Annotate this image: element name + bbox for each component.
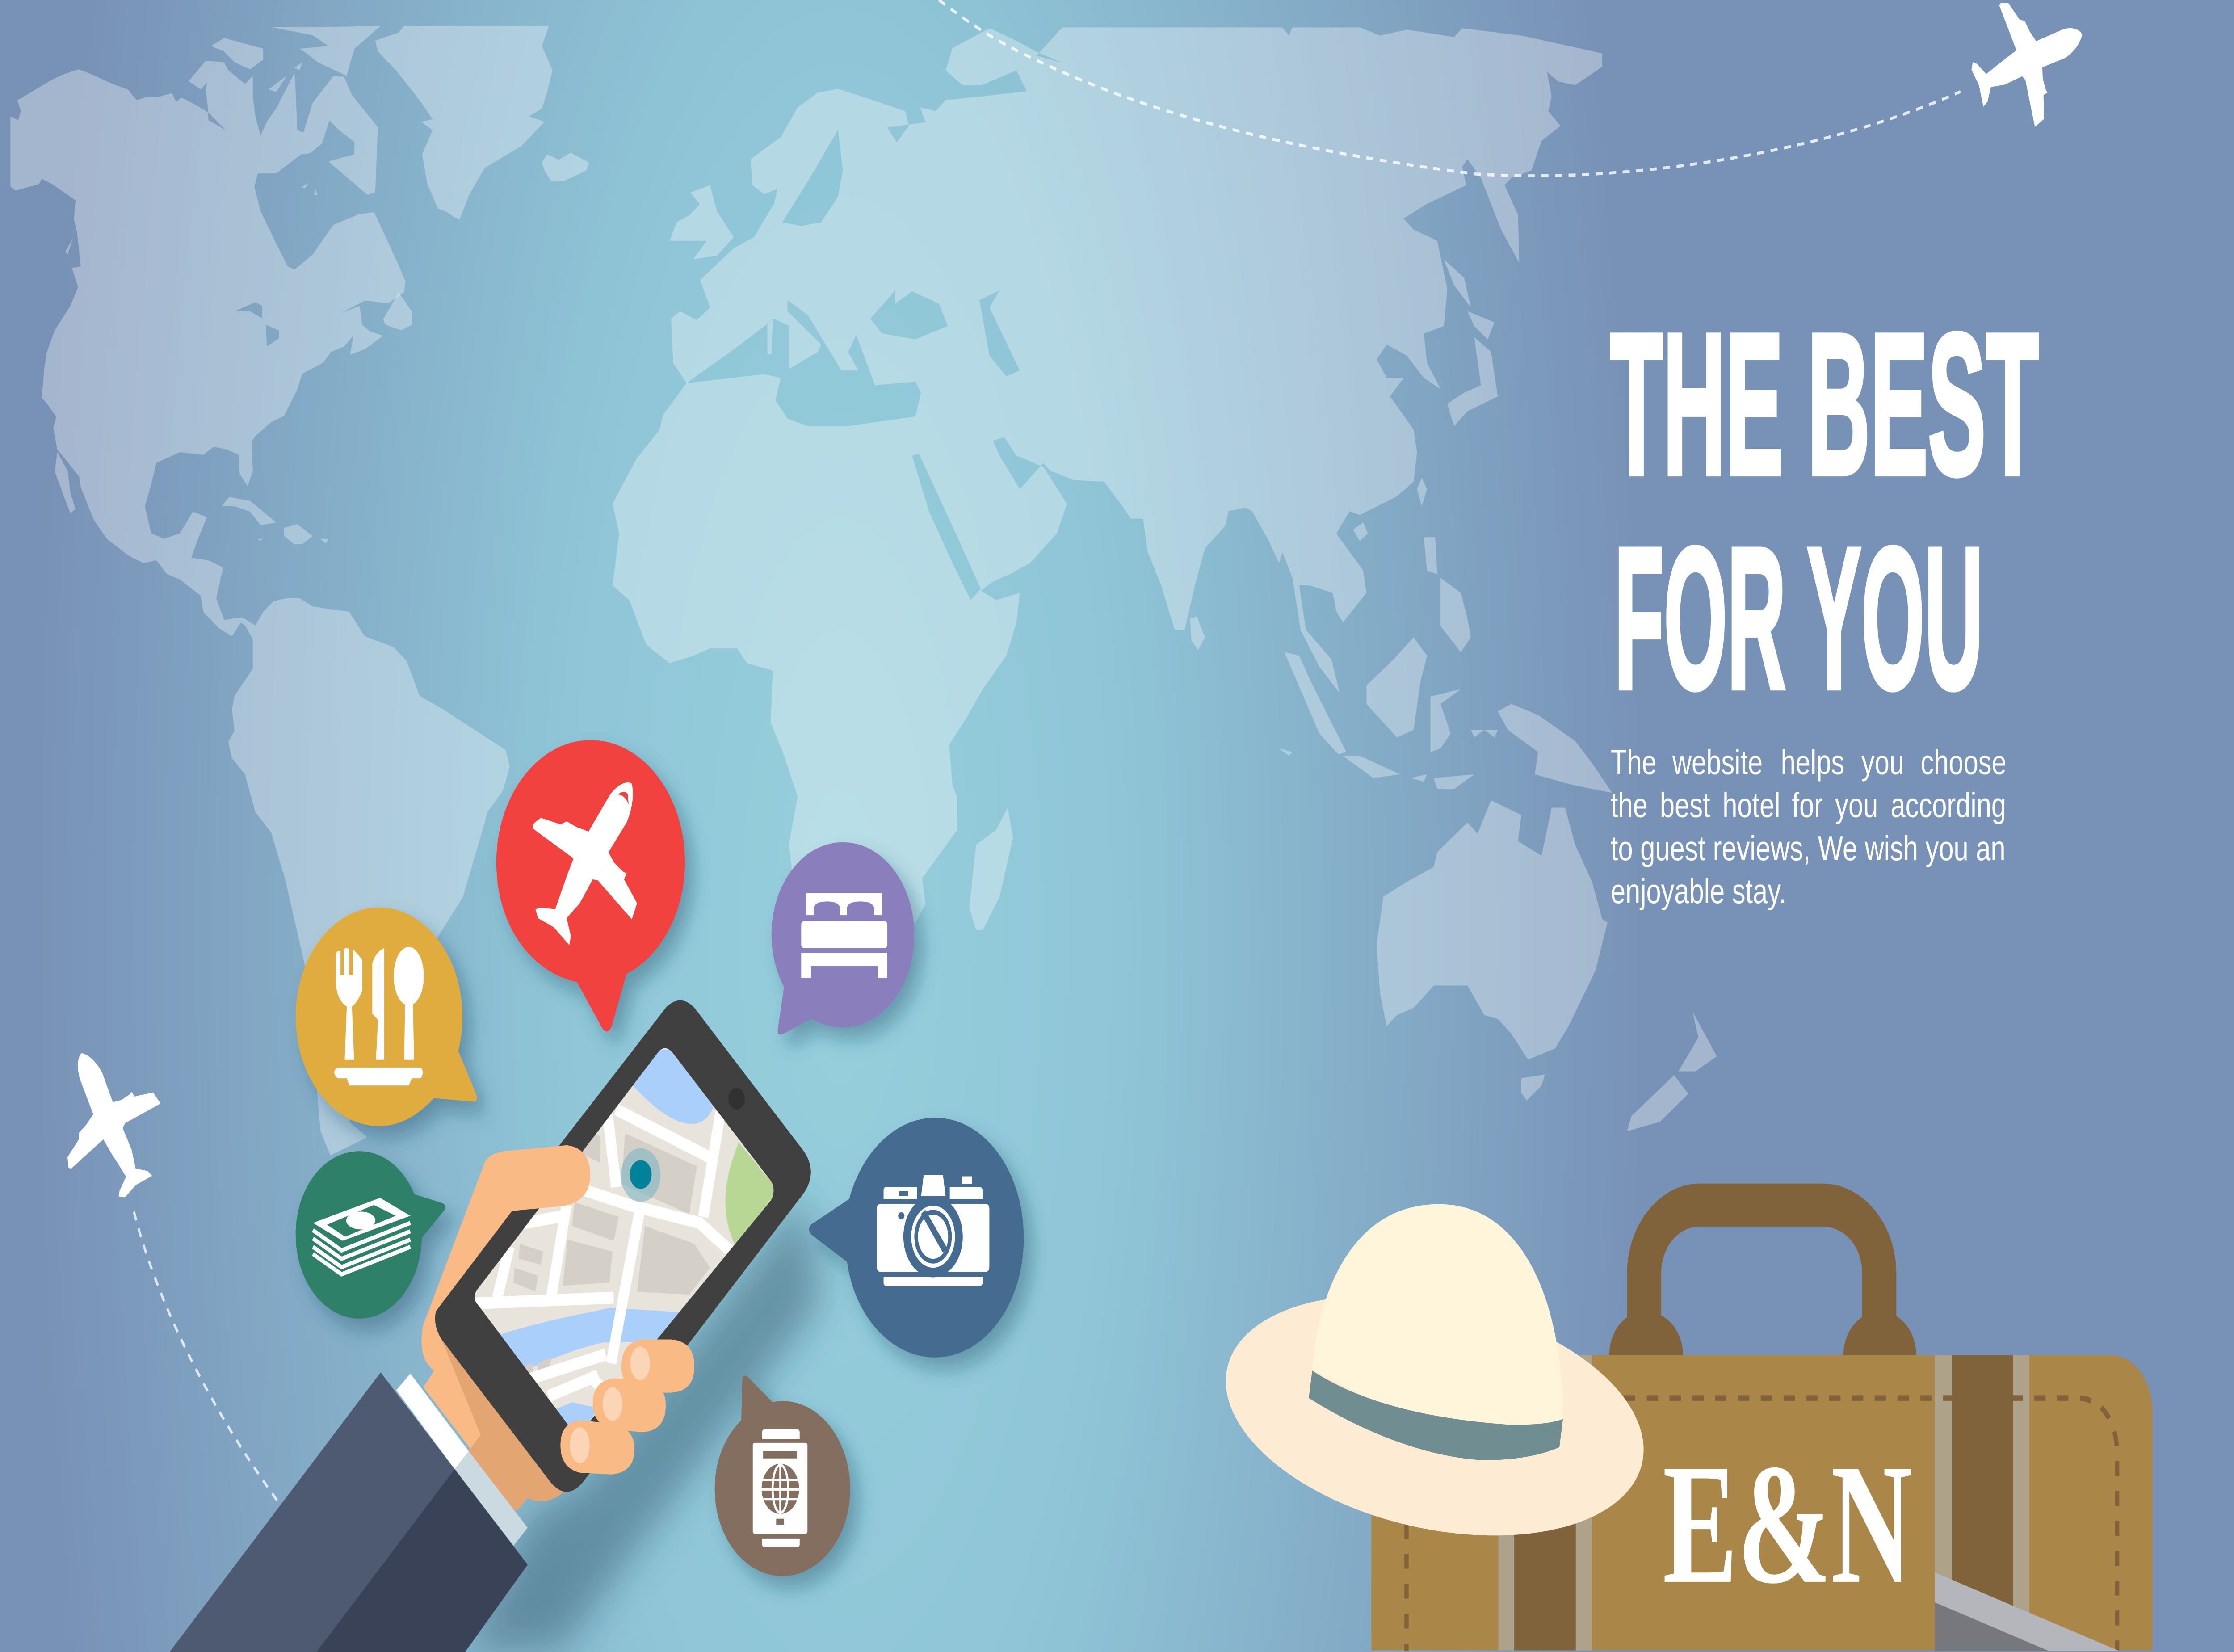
bubble: passport — [715, 1375, 850, 1576]
description text: hotel — [1722, 786, 1780, 824]
world map — [10, 26, 1717, 1156]
map: Eurasia, Africa, Oceania — [613, 27, 1612, 1100]
description text: you — [1835, 786, 1878, 824]
hat crown — [1312, 1204, 1563, 1425]
description text: best — [1660, 786, 1710, 824]
bubble: restaurant — [296, 908, 477, 1126]
title — [1610, 291, 2039, 731]
icon: airplane top right — [1959, 0, 2086, 147]
description text: to guest reviews, We wish you an — [1611, 828, 2006, 868]
phone speaker — [728, 1088, 745, 1110]
flight path: left dashed route — [134, 1211, 278, 1501]
description text: according — [1891, 786, 2006, 824]
sun hat — [1213, 1204, 1656, 1569]
description text: The — [1611, 742, 1657, 782]
suitcase corner flap — [1935, 1572, 2119, 1651]
description text: enjoyable stay. — [1611, 871, 1786, 911]
icon: airplane left — [44, 1047, 177, 1212]
hand: palm behind phone — [421, 1166, 603, 1511]
hand: thumb over phone — [426, 1145, 590, 1324]
map location pin — [621, 1148, 660, 1202]
description text: choose — [1920, 742, 2007, 782]
suitcase handle — [1609, 1184, 1916, 1356]
phone and arm shadow — [468, 1193, 822, 1650]
hat band — [1309, 1370, 1563, 1460]
flight path: top dashed route — [939, 0, 1961, 176]
bubble: camera — [809, 1118, 1024, 1358]
description text: website — [1672, 742, 1763, 782]
map: the Americas — [10, 26, 589, 1156]
description text: the — [1611, 786, 1648, 824]
map: New Zealand — [1627, 1012, 1717, 1131]
description text: helps — [1781, 742, 1844, 782]
shirt cuff — [396, 1374, 528, 1546]
bubble: money — [296, 1151, 445, 1319]
luggage straps — [1498, 1355, 2029, 1650]
suit sleeve — [170, 1372, 528, 1652]
brand logo: E&N — [1663, 1429, 1912, 1619]
smartphone — [435, 1000, 811, 1492]
hat brim — [1213, 1261, 1656, 1569]
description text: for — [1792, 786, 1823, 824]
hand: fingers — [560, 1340, 694, 1475]
phone screen: map — [475, 1048, 774, 1425]
illustration: hand, phone and service bubbles — [170, 740, 1024, 1652]
suitcase — [1371, 1184, 2153, 1651]
bubble: hotel — [772, 842, 914, 1035]
bubble: flight — [496, 740, 685, 1031]
suitcase body — [1371, 1355, 2153, 1650]
description text: you — [1861, 742, 1904, 782]
stitching — [1407, 1398, 2117, 1651]
